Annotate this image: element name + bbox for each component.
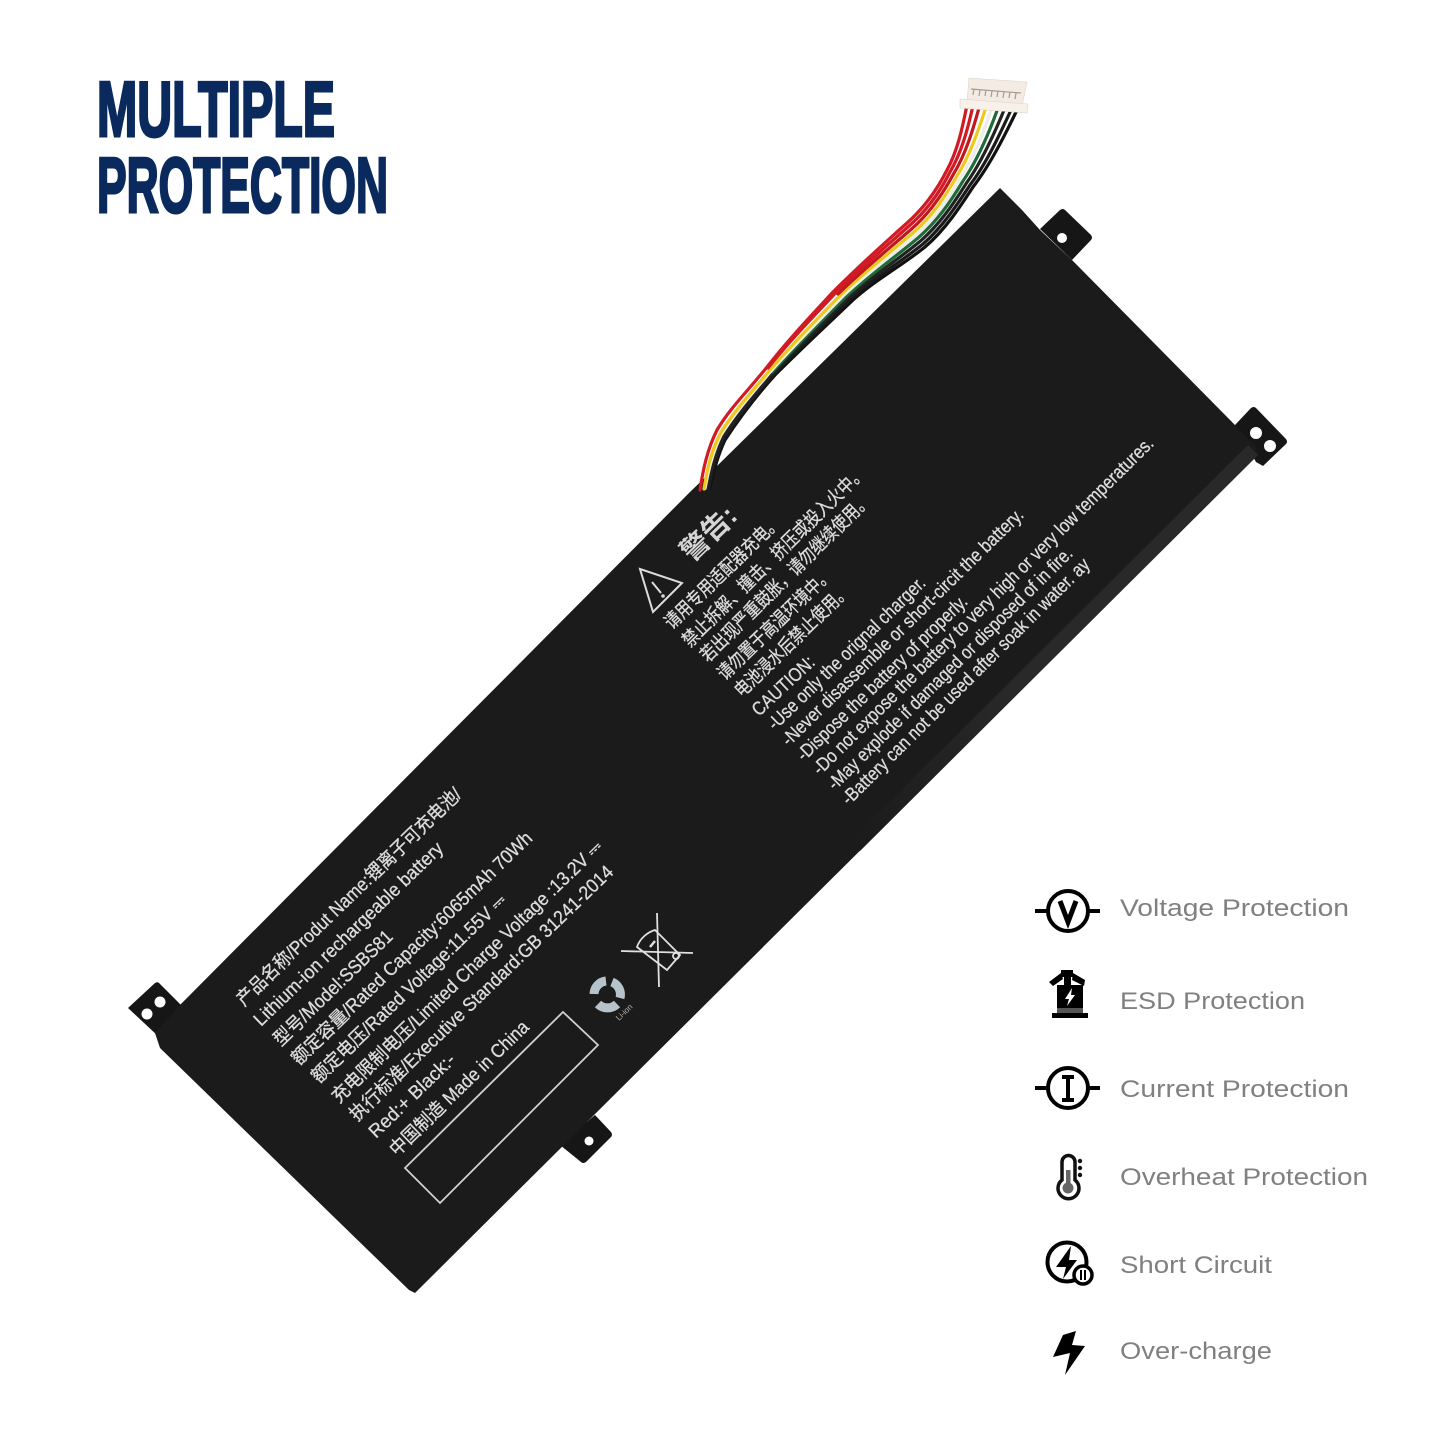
wire harness xyxy=(700,105,1017,490)
title xyxy=(97,65,388,229)
spec text block: 产品名称/Produt Name:锂离子可充电池/ xyxy=(232,783,467,1011)
spec text block: 中国制造 Made in China xyxy=(385,1016,534,1161)
protection: over-charge xyxy=(1053,1331,1272,1375)
warning text block: -May explode if damaged or disposed of in fire. xyxy=(824,543,1077,795)
warning text block: 请勿置于高温环境中。 xyxy=(713,564,837,685)
warning text block xyxy=(660,433,1158,810)
warning text block: 若出现严重鼓胀，请勿继续使用。 xyxy=(696,490,876,667)
label: current: Current Protection xyxy=(1120,1076,1349,1103)
icon: voltage xyxy=(1035,891,1100,931)
warning text block: -Use only the orignal charger. xyxy=(764,573,930,735)
spec text block xyxy=(232,783,618,1161)
title: MULTIPLE xyxy=(97,65,335,153)
spec text block: Lithium-ion rechargeable battery xyxy=(250,838,448,1031)
icon: current xyxy=(1035,1068,1100,1108)
label box xyxy=(405,1012,598,1203)
battery mounting tabs xyxy=(128,209,1287,1163)
label: over-charge: Over-charge xyxy=(1120,1338,1272,1365)
icon: warning triangle xyxy=(640,569,682,612)
warning text block: -Do not expose the battery to very high or very low temperatures. xyxy=(809,433,1158,780)
label: overheat: Overheat Protection xyxy=(1120,1164,1368,1191)
warning text block: 禁止拆解、撞击、挤压或投入火中。 xyxy=(678,462,870,652)
warning text block: -Dispose the battery of properly. xyxy=(793,591,972,766)
battery lower edge strip xyxy=(850,445,1258,851)
icon: lightning bolt xyxy=(1053,1331,1085,1375)
wire connector xyxy=(960,78,1028,113)
warning text block: 警告: xyxy=(675,500,743,567)
protection: overheat xyxy=(1058,1156,1368,1199)
icon: recycle xyxy=(594,981,634,1022)
warning text block: -Never disassemble or short-circit the battery. xyxy=(778,505,1028,751)
icon: crossed-out bin xyxy=(621,913,693,987)
icon: esd xyxy=(1049,970,1088,1018)
icon: recycle: Li-ion xyxy=(614,1002,634,1022)
protection: short circuit xyxy=(1048,1242,1272,1284)
protection: esd xyxy=(1049,970,1305,1018)
title: PROTECTION xyxy=(97,141,388,229)
warning text block: 电池浸水后禁止使用。 xyxy=(730,580,855,702)
label: short circuit: Short Circuit xyxy=(1120,1252,1272,1279)
spec text block: 充电限制电压/Limited Charge Voltage :13.2V ⎓ xyxy=(327,836,607,1108)
spec text block: 型号/Model:SSBS81 xyxy=(269,926,397,1051)
battery body xyxy=(155,188,1258,1293)
protection: current xyxy=(1035,1068,1349,1108)
spec text block: 额定容量/Rated Capacity:6065mAh 70Wh xyxy=(287,827,537,1070)
label: esd: ESD Protection xyxy=(1120,988,1305,1015)
spec text block: 执行标准/Executive Standard:GB 31241-2014 xyxy=(345,861,618,1126)
label: voltage: Voltage Protection xyxy=(1120,895,1349,922)
spec text block: Red:+ Black:- xyxy=(365,1050,460,1143)
spec text block: 额定电压/Rated Voltage:11.55V ⎓ xyxy=(307,890,511,1088)
icon: thermometer xyxy=(1058,1156,1082,1199)
warning text block: -Battery can not be used after soak in water. ay xyxy=(838,554,1095,810)
protection: voltage xyxy=(1035,891,1349,931)
icon: short circuit xyxy=(1048,1242,1092,1284)
battery xyxy=(128,78,1287,1293)
warning text block: CAUTION: xyxy=(748,652,819,721)
warning text block: 请用专用适配器充电。 xyxy=(660,511,786,634)
